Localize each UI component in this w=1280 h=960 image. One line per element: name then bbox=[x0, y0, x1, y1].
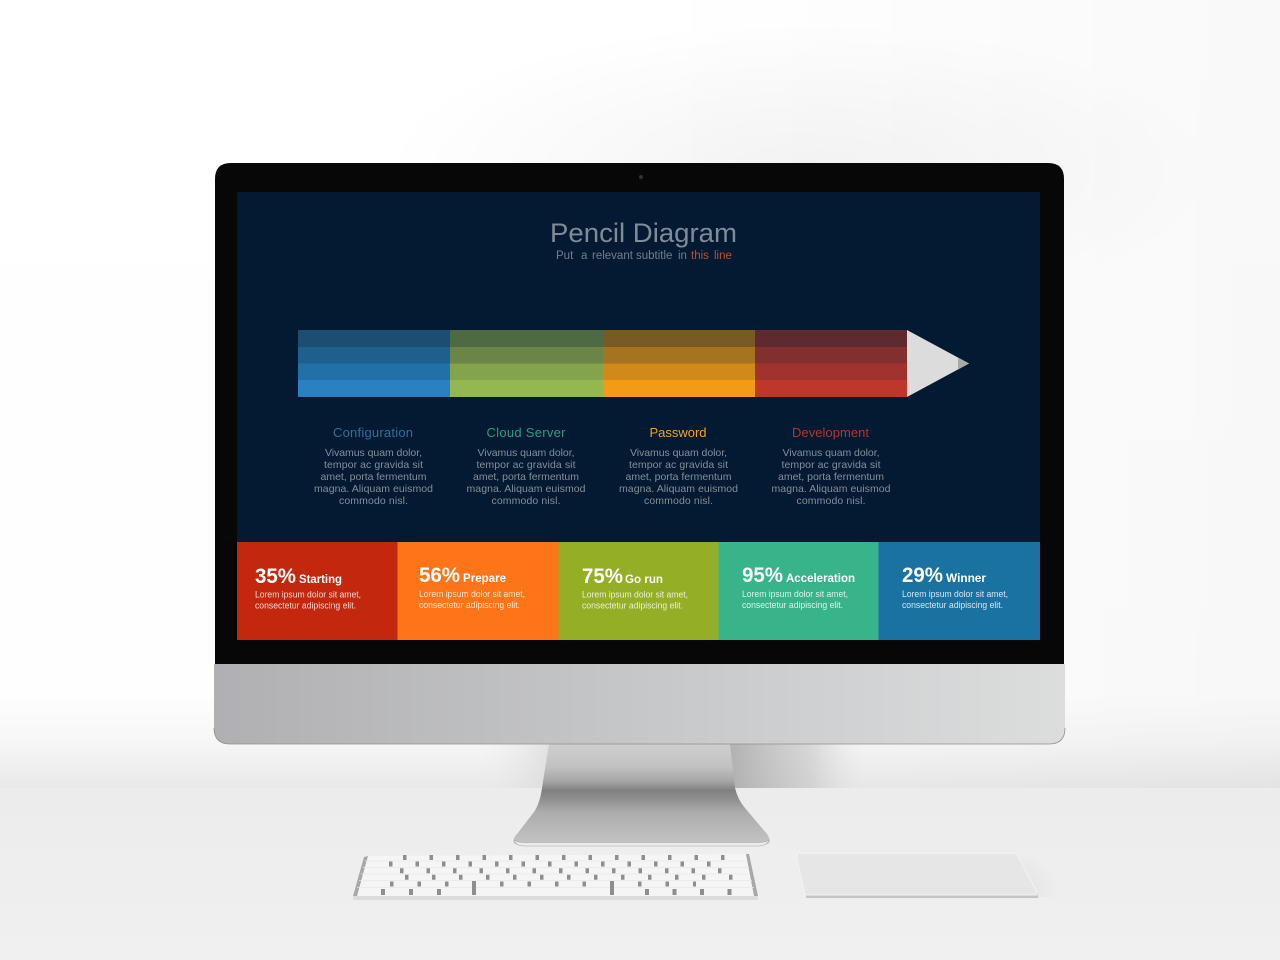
caption: Development: amet, porta fermentum bbox=[778, 471, 884, 483]
monitor chin edge bbox=[214, 728, 1065, 744]
caption: Password: magna. Aliquam euismod bbox=[619, 483, 738, 495]
panel: 35% Starting: consectetur adipiscing elit. bbox=[255, 600, 356, 612]
pencil segment: red bbox=[755, 330, 907, 397]
panel: 75% Go run: Go run bbox=[625, 572, 663, 586]
trackpad bbox=[797, 853, 1060, 898]
panel: 35% Starting: Lorem ipsum dolor sit amet, bbox=[255, 590, 361, 600]
caption: Configuration: amet, porta fermentum bbox=[320, 471, 427, 483]
panel: 95% Acceleration: Lorem ipsum dolor sit amet, bbox=[742, 589, 848, 600]
subtitle: in bbox=[678, 250, 687, 262]
title: Pencil Diagram bbox=[550, 218, 737, 248]
panel: 29% Winner bbox=[878, 542, 1040, 640]
caption: Cloud Server: commodo nisl. bbox=[492, 495, 560, 507]
panel: 95% Acceleration bbox=[718, 542, 878, 640]
panel: 95% Acceleration: consectetur adipiscing elit. bbox=[742, 600, 843, 611]
caption: Configuration bbox=[314, 425, 433, 507]
panel: 29% Winner: Lorem ipsum dolor sit amet, bbox=[902, 589, 1008, 600]
caption: Cloud Server bbox=[466, 425, 586, 507]
panel: 56% Prepare: Lorem ipsum dolor sit amet, bbox=[419, 589, 525, 600]
monitor stand bbox=[513, 744, 770, 846]
panel: 35% Starting bbox=[237, 542, 398, 640]
panel: 56% Prepare: 56% bbox=[419, 564, 460, 587]
caption: Development bbox=[772, 425, 891, 507]
panel: 75% Go run bbox=[558, 542, 718, 640]
caption: Password: amet, porta fermentum bbox=[626, 471, 732, 483]
caption: Configuration: magna. Aliquam euismod bbox=[314, 483, 433, 495]
caption: Password: Vivamus quam dolor, bbox=[630, 447, 727, 459]
panel: 56% Prepare: Prepare bbox=[463, 571, 506, 585]
caption: Password: commodo nisl. bbox=[644, 495, 713, 507]
caption: Cloud Server: Cloud Server bbox=[486, 425, 566, 440]
caption: Password: Password bbox=[650, 425, 706, 440]
panel: 29% Winner: Winner bbox=[946, 571, 986, 585]
subtitle: this bbox=[691, 250, 709, 262]
caption: Configuration: commodo nisl. bbox=[339, 495, 408, 507]
panel: 35% Starting: 35% bbox=[255, 565, 296, 588]
caption: Cloud Server: Vivamus quam dolor, bbox=[478, 447, 574, 459]
pencil segment: blue bbox=[298, 330, 450, 397]
monitor chin bbox=[214, 664, 1065, 744]
caption: Password: tempor ac gravida sit bbox=[629, 459, 728, 471]
panel: 95% Acceleration: 95% bbox=[742, 564, 783, 587]
panel: 35% Starting: Starting bbox=[299, 572, 342, 586]
caption: Development: commodo nisl. bbox=[796, 495, 866, 507]
panel: 75% Go run: Lorem ipsum dolor sit amet, bbox=[582, 590, 688, 600]
panel: 75% Go run: 75% bbox=[582, 565, 623, 588]
caption: Configuration: tempor ac gravida sit bbox=[324, 459, 423, 471]
subtitle: Put bbox=[556, 250, 574, 262]
caption: Configuration: Vivamus quam dolor, bbox=[325, 447, 422, 459]
caption: Cloud Server: tempor ac gravida sit bbox=[476, 459, 576, 471]
panel: 56% Prepare: consectetur adipiscing elit. bbox=[419, 600, 520, 611]
caption: Configuration: Configuration bbox=[333, 425, 413, 440]
panel: 29% Winner: consectetur adipiscing elit. bbox=[902, 600, 1003, 611]
monitor bezel bbox=[215, 163, 1064, 664]
caption: Development: Development bbox=[792, 425, 869, 440]
caption: Password bbox=[619, 425, 738, 507]
pencil tip bbox=[907, 330, 969, 397]
screen background bbox=[237, 192, 1040, 640]
pencil diagram bbox=[298, 330, 969, 397]
caption: Development: Vivamus quam dolor, bbox=[782, 447, 880, 459]
subtitle: relevant bbox=[592, 250, 634, 262]
caption: Cloud Server: amet, porta fermentum bbox=[473, 471, 579, 483]
subtitle: line bbox=[714, 250, 732, 262]
pencil segment: orange bbox=[603, 330, 755, 397]
panel: 75% Go run: consectetur adipiscing elit. bbox=[582, 600, 683, 612]
subtitle: subtitle bbox=[636, 250, 672, 262]
panel: 29% Winner: 29% bbox=[902, 564, 943, 587]
subtitle: a bbox=[581, 250, 588, 262]
caption: Development: tempor ac gravida sit bbox=[782, 459, 881, 471]
pencil segment: green bbox=[450, 330, 603, 397]
camera bbox=[639, 175, 643, 179]
monitor body bbox=[214, 163, 1065, 744]
caption: Development: magna. Aliquam euismod bbox=[772, 483, 891, 495]
panel: 56% Prepare bbox=[398, 542, 558, 640]
caption: Cloud Server: magna. Aliquam euismod bbox=[466, 483, 586, 495]
panel: 95% Acceleration: Acceleration bbox=[786, 571, 855, 585]
keyboard bbox=[353, 854, 758, 900]
